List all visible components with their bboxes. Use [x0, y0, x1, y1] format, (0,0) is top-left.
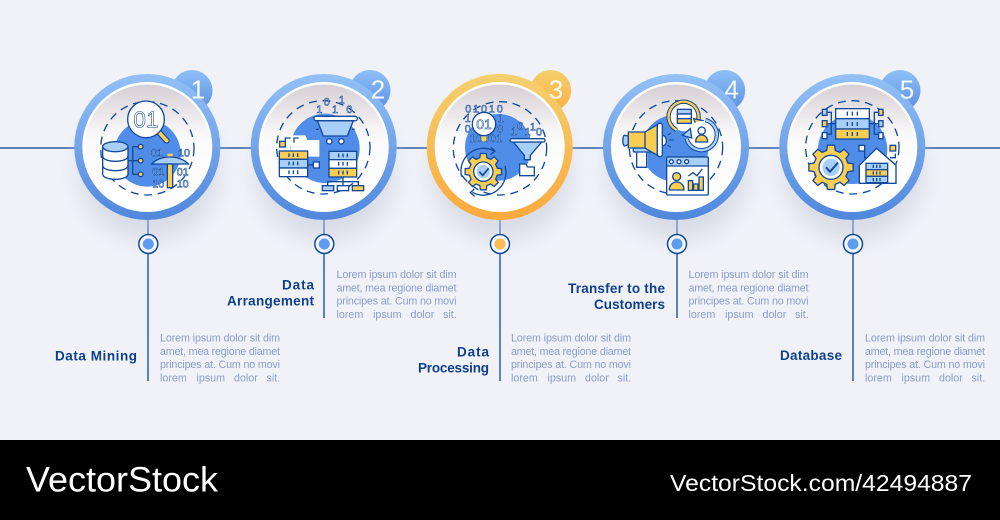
step 3 text: ipsum [548, 372, 576, 384]
icon: data arrangement: 0 [324, 96, 330, 108]
step 2 medallion: 2 [371, 74, 385, 104]
step 5 text: amet, mea regione diamet [865, 346, 985, 358]
icon: data mining: 10 [178, 147, 190, 159]
icon: data processing: 0 [536, 127, 542, 139]
timeline connector [0, 147, 1000, 149]
icon: data mining: 10 [152, 178, 164, 190]
step 3 text: Lorem ipsum dolor sit dim [511, 332, 631, 344]
step 2 text: lorem [336, 309, 363, 321]
icon: data processing: 1 [498, 113, 504, 125]
step 1 medallion: 1 [191, 74, 205, 104]
step 3 text: sit. [618, 372, 631, 384]
step 5 heading: Database [780, 348, 842, 363]
step 2 text: amet, mea regione diamet [336, 282, 457, 294]
step 5 text: dolor [939, 372, 963, 384]
step 1 text [160, 332, 280, 384]
step 5 text: principes at. Cum no movi [865, 359, 985, 371]
step 1 heading: Data Mining [55, 348, 137, 364]
step 4 heading: Transfer to the [568, 281, 665, 296]
icon: data processing: 1 [465, 113, 471, 125]
step 1 text: Lorem ipsum dolor sit dim [160, 332, 280, 344]
step 2 heading: Arrangement [227, 294, 314, 308]
icon: data processing: 1 [511, 126, 517, 138]
icon: data processing: 0 [517, 120, 523, 132]
step 4 text [688, 269, 809, 321]
icon: data mining: 10 [177, 178, 189, 190]
icon: data processing: 01010 [465, 103, 503, 115]
footer image id: VectorStock.com/42494887 [670, 470, 972, 496]
step 4 text: Lorem ipsum dolor sit dim [688, 269, 809, 281]
step 4 text: lorem [688, 309, 715, 321]
step 3 marker [490, 234, 510, 254]
icon: data mining: 01 [152, 166, 164, 178]
step 5 text [865, 332, 985, 384]
step 3 medallion: 3 [549, 74, 563, 104]
step 2 text: dolor [410, 309, 435, 321]
step 5 medallion: 5 [900, 74, 914, 104]
icon: database [806, 101, 899, 194]
step 2 text: principes at. Cum no movi [336, 296, 456, 308]
step 5 text: Lorem ipsum dolor sit dim [865, 332, 985, 344]
icon: data arrangement: 1 [339, 95, 345, 107]
step 3 heading [418, 344, 489, 376]
step 4 medallion: 4 [724, 74, 739, 104]
step 5 text: lorem [865, 372, 892, 384]
footer bar [0, 440, 1000, 520]
step 4 text: amet, mea regione diamet [688, 282, 809, 294]
step 4 text: sit. [795, 309, 809, 321]
step 4 medallion [603, 70, 749, 240]
step 4 text: principes at. Cum no movi [688, 296, 808, 308]
icon: data arrangement: 0 [346, 104, 352, 116]
step 4 heading [568, 281, 665, 312]
step 2 marker [315, 234, 334, 254]
step 3 text [511, 332, 631, 384]
step 3 text: amet, mea regione diamet [511, 346, 631, 358]
step 3 medallion [427, 70, 573, 240]
icon: data processing: 1 [530, 121, 536, 133]
step 3 text: dolor [585, 372, 609, 384]
step 2 heading: Data [282, 278, 314, 292]
step 1 text: principes at. Cum no movi [160, 359, 280, 371]
step 2 medallion [251, 70, 397, 240]
stem 1 [147, 215, 149, 381]
step 2 text: Lorem ipsum dolor sit dim [336, 269, 457, 281]
icon: data arrangement: 1 [332, 104, 338, 116]
step 1 text: sit. [266, 372, 280, 384]
icon: data arrangement: 1 [316, 104, 322, 116]
step 3 text: lorem [511, 372, 538, 384]
step 2 text: sit. [443, 309, 457, 321]
stem 5 [852, 215, 854, 381]
step 1 marker [139, 234, 158, 254]
icon: data processing: 0 [497, 124, 503, 136]
icon: data mining: 01 [133, 107, 159, 133]
step 3 heading: Data [457, 344, 489, 360]
icon: data processing: 1 [525, 127, 531, 139]
step 5 text: ipsum [902, 372, 930, 384]
icon: data mining [101, 101, 194, 195]
step 1 text: amet, mea regione diamet [160, 346, 280, 358]
footer logo: VectorStock [26, 460, 219, 500]
step 1 text: lorem [160, 372, 187, 384]
step 5 text: sit. [972, 372, 985, 384]
step 4 text: dolor [762, 309, 787, 321]
icon: data mining: 01 [177, 166, 189, 178]
icon: data processing: 0 [465, 124, 471, 136]
step 4 heading: Customers [594, 297, 665, 312]
step 4 marker [668, 234, 686, 254]
icon: transfer to the customers [623, 101, 723, 195]
icon: data processing: 01 [476, 116, 492, 132]
step 5 medallion [779, 70, 925, 240]
step 3 text: principes at. Cum no movi [511, 359, 631, 371]
icon: data processing: 10001 [470, 133, 502, 145]
step 2 text: ipsum [373, 309, 402, 321]
step 5 marker [844, 234, 862, 254]
step 1 text: ipsum [196, 372, 225, 384]
stem 2 [323, 215, 325, 318]
step 1 text: dolor [234, 372, 258, 384]
icon: data mining: 01 [151, 147, 163, 159]
step 2 text [336, 269, 457, 321]
step 1 medallion [74, 70, 220, 240]
step 3 heading: Processing [418, 360, 489, 376]
icon: data processing [453, 102, 547, 196]
stem 4 [676, 215, 678, 318]
step 2 heading [227, 278, 314, 308]
stem 3 [499, 215, 501, 381]
step 4 text: ipsum [725, 309, 754, 321]
icon: data arrangement [277, 95, 370, 194]
